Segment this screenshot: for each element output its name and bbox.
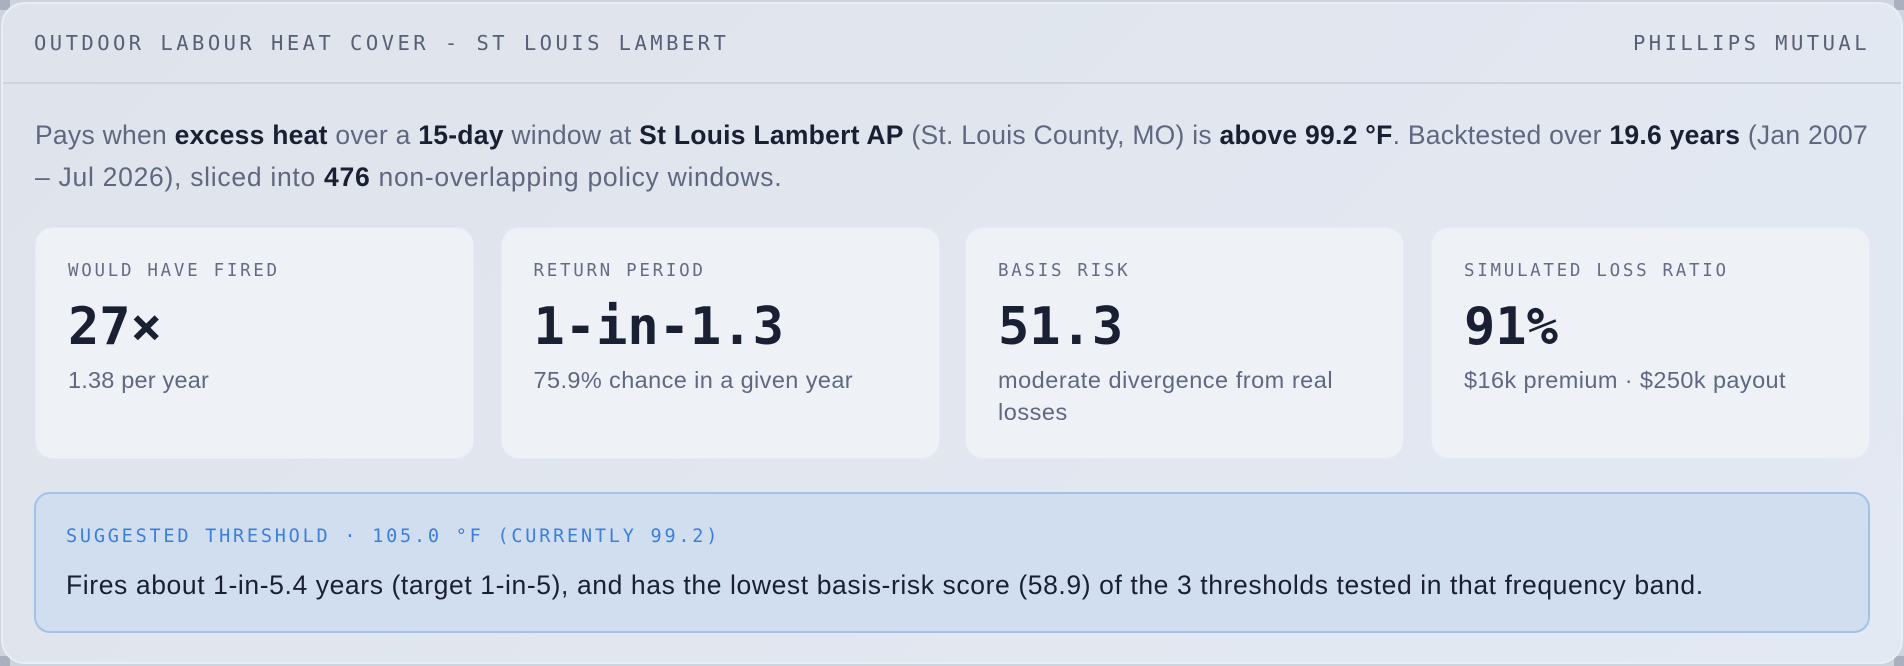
card value: 51.3 bbox=[998, 297, 1123, 357]
stat card: return period bbox=[500, 227, 940, 459]
card value: 27× bbox=[68, 297, 162, 357]
card value: 1-in-1.3 bbox=[534, 297, 784, 357]
card note: moderate divergence from real bbox=[998, 367, 1333, 393]
header label: insurer: PHILLIPS MUTUAL bbox=[1633, 31, 1870, 55]
card label: WOULD HAVE FIRED bbox=[68, 261, 280, 281]
intro paragraph bbox=[35, 120, 1868, 192]
stat card: basis risk bbox=[965, 227, 1404, 459]
card note: losses bbox=[998, 398, 1068, 424]
card label: RETURN PERIOD bbox=[534, 261, 706, 281]
intro paragraph: – Jul 2026), sliced into 476 non-overlapping policy windows. bbox=[35, 162, 782, 192]
card label: BASIS RISK bbox=[998, 261, 1130, 281]
card note: 1.38 per year bbox=[68, 367, 209, 393]
callout: suggested threshold bbox=[34, 492, 1870, 633]
stat card: would have fired bbox=[35, 227, 474, 459]
intro paragraph: Pays when excess heat over a 15-day window at St Louis Lambert AP (St. Louis County, MO) is above 99.2 °F. Backtested over 19.6 years (Jan 2007 bbox=[35, 120, 1868, 150]
card note: $16k premium · $250k payout bbox=[1464, 367, 1786, 393]
header label: product name: OUTDOOR LABOUR HEAT COVER - ST LOUIS LAMBERT bbox=[34, 31, 729, 55]
card value: 91% bbox=[1464, 297, 1558, 357]
stat card: simulated loss ratio bbox=[1431, 227, 1870, 459]
card note: 75.9% chance in a given year bbox=[534, 367, 853, 393]
card note bbox=[998, 367, 1333, 424]
callout text: Fires about 1-in-5.4 years (target 1-in-5), and has the lowest basis-risk score (58.9) of the 3 thresholds tested in that frequency band. bbox=[66, 570, 1704, 600]
callout heading: SUGGESTED THRESHOLD · 105.0 °F (CURRENTLY 99.2) bbox=[66, 526, 720, 547]
card label: SIMULATED LOSS RATIO bbox=[1464, 261, 1729, 281]
